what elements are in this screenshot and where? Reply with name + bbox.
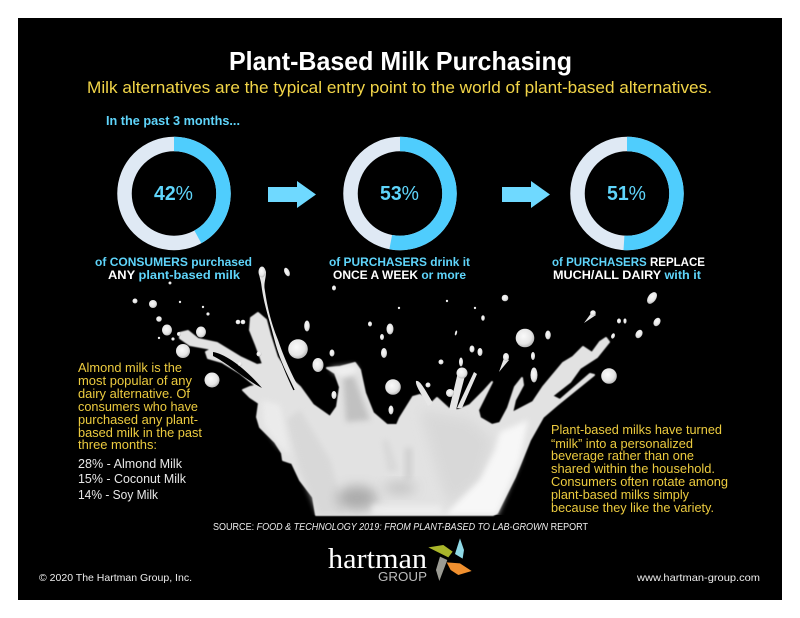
source line: SOURCE: FOOD & TECHNOLOGY 2019: FROM PLANT-BASED TO LAB-GROWN REPORT xyxy=(213,521,589,533)
caption 3 xyxy=(552,255,705,282)
caption 2: ONCE A WEEK or more xyxy=(333,268,466,282)
caption 3: MUCH/ALL DAIRY with it xyxy=(553,268,701,282)
milk type list: 28% - Almond Milk xyxy=(78,457,183,471)
slit between arms xyxy=(213,352,262,388)
right text block: shared within the household. xyxy=(551,462,715,476)
splash body xyxy=(180,313,609,515)
donut chart: 53%: 53% xyxy=(380,183,419,205)
caption 3: of PURCHASERS REPLACE xyxy=(552,255,705,269)
right text block: beverage rather than one xyxy=(551,449,694,463)
milk type list xyxy=(78,457,187,502)
donut chart: 53% xyxy=(350,144,450,243)
caption 2 xyxy=(329,255,470,282)
donut chart: 42% xyxy=(124,144,224,243)
subtitle: Milk alternatives are the typical entry point to the world of plant-based alternatives. xyxy=(87,78,712,97)
left text block: most popular of any xyxy=(78,374,193,388)
donut chart: 51% xyxy=(578,144,676,243)
left text block: Almond milk is the xyxy=(78,361,182,375)
caption 1 xyxy=(95,255,252,282)
gap between strand and splash xyxy=(272,326,294,390)
icon: pinwheel xyxy=(428,538,472,581)
left text block: based milk in the past xyxy=(78,426,203,440)
right text block: plant-based milks simply xyxy=(551,488,690,502)
donut chart: 51%: 51% xyxy=(607,183,646,205)
caption 2: of PURCHASERS drink it xyxy=(329,255,470,269)
copyright: © 2020 The Hartman Group, Inc. xyxy=(39,572,192,584)
timeframe label: In the past 3 months... xyxy=(106,114,240,128)
logo: GROUP xyxy=(378,569,427,584)
arrow 1 xyxy=(268,181,316,208)
milk droplets xyxy=(132,266,662,414)
left text block: consumers who have xyxy=(78,400,198,414)
milk strands xyxy=(259,268,596,410)
title: Plant-Based Milk Purchasing xyxy=(229,46,572,76)
right text block: Consumers often rotate among xyxy=(551,475,728,489)
donut chart: 42%: 42% xyxy=(154,183,193,205)
logo xyxy=(328,538,472,584)
right text block: Plant-based milks have turned xyxy=(551,423,722,437)
left text block: dairy alternative. Of xyxy=(78,387,191,401)
milk type list: 15% - Coconut Milk xyxy=(78,472,187,486)
left text block xyxy=(78,361,203,502)
milk type list: 14% - Soy Milk xyxy=(78,488,159,502)
milk splash illustration xyxy=(132,266,662,515)
left text block: purchased any plant- xyxy=(78,413,198,427)
splash shading xyxy=(262,365,528,515)
left text block: three months: xyxy=(78,438,157,452)
website: www.hartman-group.com xyxy=(636,572,760,584)
right text block xyxy=(551,423,728,515)
caption 1: of CONSUMERS purchased xyxy=(95,255,252,269)
logo: hartman xyxy=(328,543,428,575)
arrow 2 xyxy=(502,181,550,208)
right text block: “milk” into a personalized xyxy=(551,437,693,451)
right text block: because they like the variety. xyxy=(551,501,714,515)
caption 1: ANY plant-based milk xyxy=(108,268,240,282)
